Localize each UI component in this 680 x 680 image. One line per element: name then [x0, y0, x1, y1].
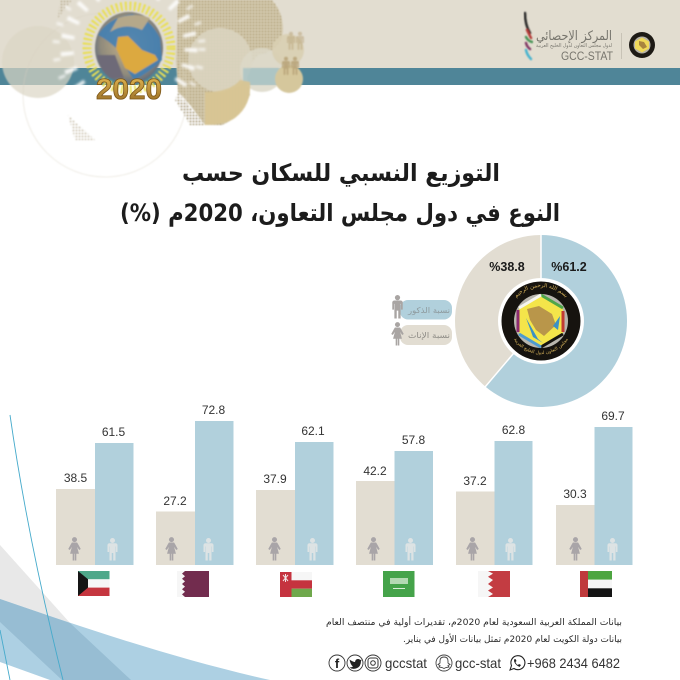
icon: whatsapp [510, 656, 525, 670]
GCC emblem: بسم الله الرحمن الرحيم [516, 283, 567, 298]
donut chart: total gender share [455, 235, 627, 407]
globe [95, 12, 163, 84]
UAE bars [556, 409, 632, 565]
Kuwait bars [56, 425, 134, 565]
header illustration: globe and world map [2, 0, 304, 177]
Qatar bars: 72.8 [202, 403, 226, 417]
flag: Oman [280, 572, 312, 597]
flag: Kuwait [78, 571, 110, 596]
flag: Bahrain [478, 571, 510, 597]
Bahrain bars: 37.2 [463, 474, 487, 488]
logo GCC-STAT wordmark: GCC-STAT [561, 51, 613, 63]
UAE bars: 69.7 [601, 409, 625, 423]
logo Arabic subtitle: لدول مجلس التعاون لدول الخليج العربية [536, 43, 612, 49]
footnotes: بيانات المملكة العربية السعودية لعام 2020م، تقديرات أولية في منتصف العام [326, 616, 622, 628]
flag: Qatar [177, 571, 209, 597]
dotted world map [2, 0, 304, 177]
male percentage: %61.2 [551, 260, 587, 274]
GCC-STAT logo [525, 13, 655, 63]
contact row [329, 655, 620, 671]
footnotes: بيانات دولة الكويت لعام 2020م تمثل بيانات الأول في يناير. [403, 633, 622, 645]
light rays [56, 0, 202, 121]
UAE bars: 30.3 [563, 487, 587, 501]
logo Arabic name: المركز الإحصائي [536, 29, 612, 44]
handle: gccstat: gccstat [385, 655, 427, 671]
small GCC emblem [629, 32, 655, 58]
title: التوزيع النسبي للسكان حسب [182, 159, 500, 187]
icon: facebook: f [335, 656, 340, 671]
Saudi Arabia bars [356, 433, 433, 565]
bar chart: gender share by country [56, 403, 632, 565]
female percentage: %38.8 [489, 260, 525, 274]
icon: twitter [347, 655, 363, 671]
legend [391, 295, 452, 345]
Oman bars: 62.1 [301, 424, 325, 438]
male share slice 61.2% [485, 235, 627, 407]
GCC emblem [502, 282, 580, 360]
Qatar bars: 27.2 [163, 494, 187, 508]
2020 gold numerals: 2020 [96, 74, 162, 106]
handle: gcc-stat: gcc-stat [455, 655, 501, 671]
Oman bars [256, 424, 334, 565]
title [120, 159, 560, 227]
country flags [78, 571, 612, 597]
legend: male: نسبة الذكور [407, 306, 450, 315]
Bahrain bars [456, 423, 532, 565]
female share slice 38.8% [455, 235, 541, 387]
legend: female: نسبة الإناث [408, 331, 450, 341]
icon: snapchat [436, 655, 452, 671]
Oman bars: 37.9 [263, 472, 287, 486]
Saudi Arabia bars: 42.2 [363, 464, 387, 478]
flag: UAE [580, 571, 612, 597]
Kuwait bars: 38.5 [64, 471, 88, 485]
ribbon mark [525, 13, 532, 59]
GCC emblem: مجلس التعاون لدول الخليج العربية [514, 338, 568, 356]
Bahrain bars: 62.8 [502, 423, 526, 437]
bottom-left decorative swoosh [0, 415, 270, 680]
icon: instagram [365, 655, 381, 671]
Saudi Arabia bars: 57.8 [402, 433, 426, 447]
people silhouettes [282, 32, 304, 75]
footnotes [326, 616, 622, 645]
phone number: +968 2434 6482 [527, 655, 620, 671]
header banner [0, 0, 680, 85]
flag: Saudi Arabia [383, 571, 414, 597]
Qatar bars [156, 403, 234, 565]
icon: facebook [329, 655, 345, 671]
title: النوع في دول مجلس التعاون، 2020م (%) [120, 199, 560, 227]
Kuwait bars: 61.5 [102, 425, 126, 439]
